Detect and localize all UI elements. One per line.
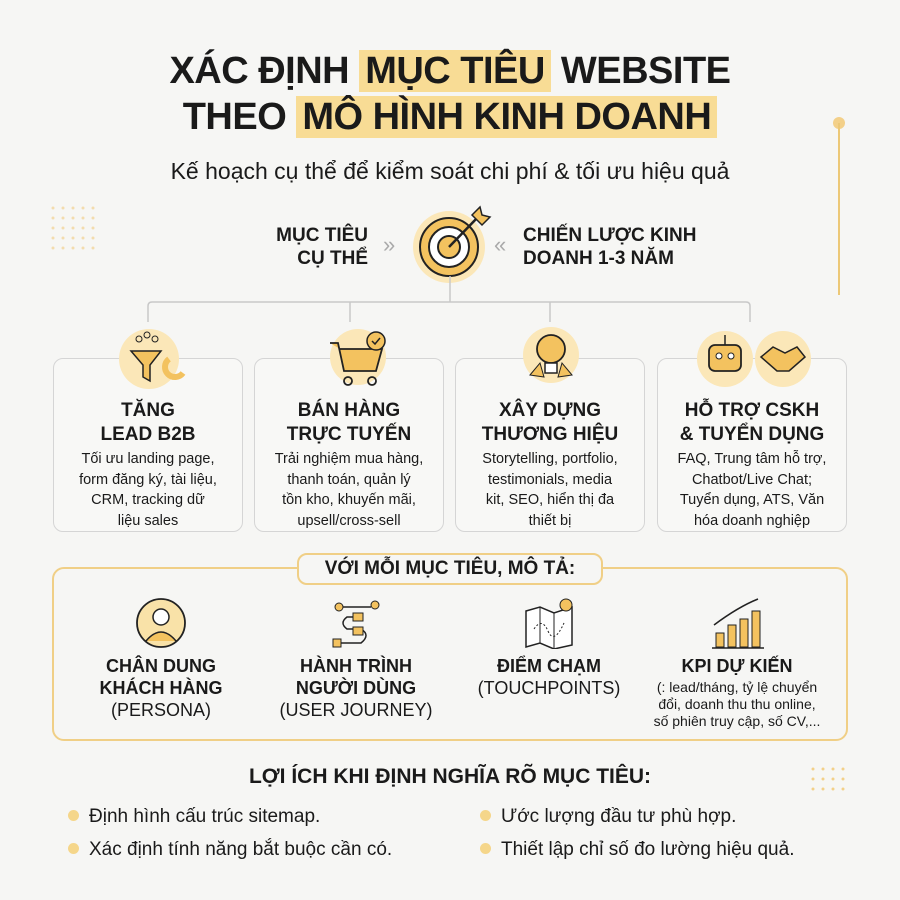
item: KPI: số phiên truy cập, số CV,...: [654, 713, 820, 729]
title: THEO MÔ HÌNH KINH DOANH: [183, 96, 711, 138]
item: persona: [100, 598, 222, 720]
decorative dots right: [812, 768, 844, 790]
item: user journey: (USER JOURNEY): [279, 700, 432, 720]
item: user journey: [279, 600, 432, 720]
benefit list: Định hình cấu trúc sitemap.: [89, 806, 320, 827]
item: user journey: NGƯỜI DÙNG: [296, 678, 416, 698]
item: persona: (PERSONA): [111, 700, 211, 720]
card 3: kit, SEO, hiển thị đa: [486, 492, 614, 508]
card 3: thiết bị: [529, 512, 571, 528]
item: persona: CHÂN DUNG: [106, 656, 216, 676]
card 4: & TUYỂN DỤNG: [680, 424, 824, 445]
card 3: THƯƠNG HIỆU: [482, 424, 618, 445]
subtitle: Kế hoạch cụ thể để kiểm soát chi phí & tối ưu hiệu quả: [171, 158, 729, 184]
item: KPI: [654, 598, 820, 729]
card 4: [657, 358, 847, 532]
card 1: [53, 358, 243, 532]
benefit list: Ước lượng đầu tư phù hợp.: [501, 806, 736, 827]
title: [169, 48, 731, 138]
card 4: Tuyển dụng, ATS, Văn: [680, 492, 824, 508]
icon: target: [413, 206, 492, 283]
card 2: thanh toán, quản lý: [287, 472, 411, 488]
card 3: XÂY DỰNG: [499, 400, 601, 421]
right label: DOANH 1-3 NĂM: [523, 248, 674, 269]
card 1: CRM, tracking dữ: [91, 492, 205, 508]
arrow right: »: [383, 232, 395, 257]
benefit list: Thiết lập chỉ số đo lường hiệu quả.: [501, 839, 794, 860]
icon: funnel magnet: [119, 329, 186, 389]
benefit list: [68, 806, 794, 860]
tree connectors: [147, 276, 751, 322]
item: KPI: đổi, doanh thu thu online,: [658, 696, 816, 712]
left label: CỤ THỂ: [297, 248, 368, 269]
panel label: [297, 553, 603, 585]
benefit list: Xác định tính năng bắt buộc cần có.: [89, 839, 392, 860]
card 2: Trải nghiệm mua hàng,: [275, 451, 423, 467]
card 1: Tối ưu landing page,: [81, 451, 215, 467]
card 3: [455, 358, 645, 532]
panel label: VỚI MỖI MỤC TIÊU, MÔ TẢ:: [325, 558, 575, 579]
item: persona: KHÁCH HÀNG: [100, 678, 222, 698]
card 4: HỖ TRỢ CSKH: [685, 400, 819, 421]
icon: cart: [330, 329, 386, 386]
item: touchpoints: (TOUCHPOINTS): [478, 678, 620, 698]
card 2: tồn kho, khuyến mãi,: [282, 492, 416, 508]
card 4: hóa doanh nghiệp: [694, 512, 810, 528]
right label: CHIẾN LƯỢC KINH: [523, 225, 696, 246]
panel: describe each goal: [52, 567, 848, 741]
title: XÁC ĐỊNH MỤC TIÊU WEBSITE: [169, 50, 731, 92]
item: touchpoints: ĐIỂM CHẠM: [497, 656, 601, 676]
left label: [276, 224, 368, 269]
right label: [523, 224, 696, 269]
card 1: TĂNG: [121, 400, 175, 421]
card 4: Chatbot/Live Chat;: [692, 472, 812, 488]
card 3: testimonials, media: [488, 472, 612, 488]
card 4: FAQ, Trung tâm hỗ trợ,: [678, 451, 826, 467]
arrow left: «: [494, 232, 506, 257]
icon: robot handshake: [697, 331, 811, 387]
card 2: BÁN HÀNG: [298, 400, 400, 421]
card 2: [254, 358, 444, 532]
card 1: LEAD B2B: [100, 424, 196, 445]
benefits heading: LỢI ÍCH KHI ĐỊNH NGHĨA RÕ MỤC TIÊU:: [249, 765, 651, 788]
card 1: form đăng ký, tài liệu,: [79, 472, 217, 488]
item: KPI: KPI DỰ KIẾN: [682, 656, 792, 676]
icon: bulb: [523, 327, 579, 383]
card 2: upsell/cross-sell: [297, 512, 401, 528]
card 3: Storytelling, portfolio,: [482, 451, 618, 467]
left label: MỤC TIÊU: [276, 225, 368, 246]
card 2: TRỰC TUYẾN: [287, 424, 411, 445]
decorative dots left: [52, 206, 94, 250]
item: user journey: HÀNH TRÌNH: [300, 656, 412, 676]
item: KPI: (: lead/tháng, tỷ lệ chuyển: [657, 679, 817, 695]
item: touchpoints: [478, 598, 620, 698]
card 1: liệu sales: [118, 512, 178, 528]
